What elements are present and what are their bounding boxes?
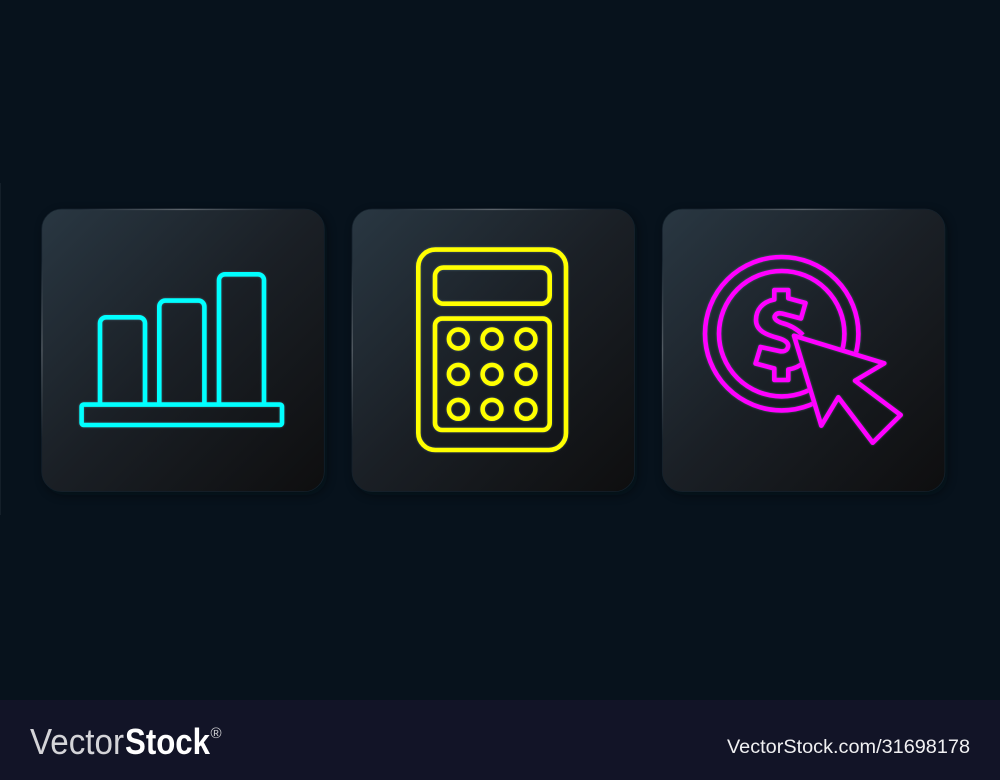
calculator keypad xyxy=(435,319,550,430)
bar 1 xyxy=(100,317,145,405)
logo word: Vector: Vector xyxy=(30,721,124,762)
bar 2 xyxy=(159,301,204,405)
logo word: Stock: Stock xyxy=(125,721,211,762)
dollar coin xyxy=(705,257,858,410)
image id text: VectorStock.com/31698178 xyxy=(727,737,970,758)
panel: calculator icon xyxy=(352,209,637,495)
calculator body xyxy=(418,250,566,450)
panel: dollar click icon xyxy=(662,209,948,495)
footer logo xyxy=(30,721,222,762)
icon: calculator xyxy=(418,250,566,450)
calculator screen xyxy=(435,268,550,304)
registered mark: ® xyxy=(210,725,222,742)
icon: bar chart xyxy=(82,274,282,425)
panel: bar chart icon xyxy=(41,209,327,495)
footer bar xyxy=(0,700,1000,780)
chart base xyxy=(82,405,282,425)
bar 3 xyxy=(219,274,264,405)
infographic canvas xyxy=(0,183,1000,780)
arrow cursor xyxy=(794,336,901,443)
icon: dollar coin with cursor xyxy=(705,257,901,443)
